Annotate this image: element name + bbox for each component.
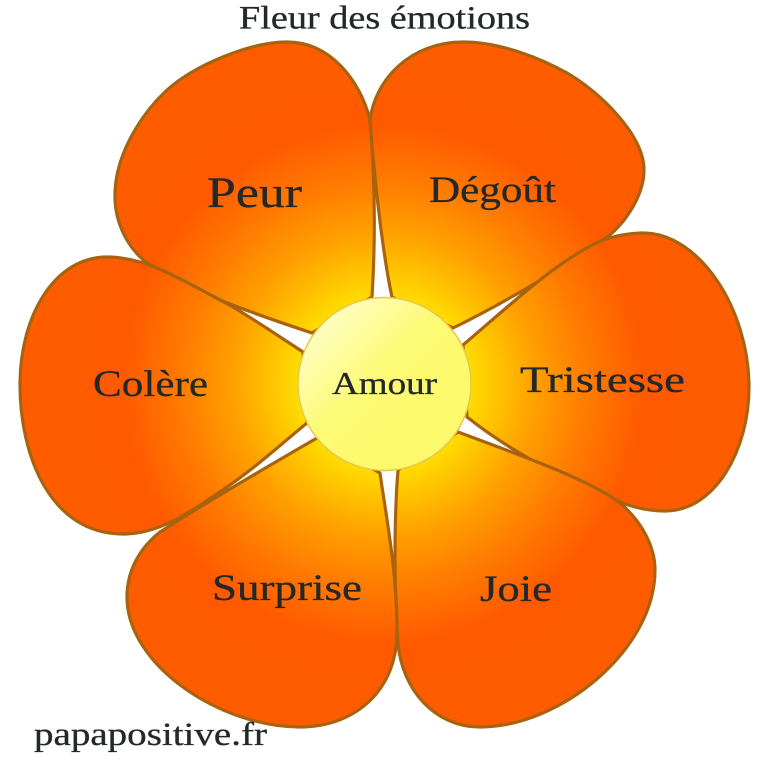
label: Peur: Peur	[207, 170, 302, 217]
title: Fleur des émotions	[239, 0, 530, 36]
label: Tristesse: Tristesse	[520, 360, 685, 401]
petal: Colère	[20, 257, 307, 534]
petal: Dégoût	[370, 42, 644, 328]
petal: Tristesse	[463, 233, 749, 511]
petal: Peur	[115, 42, 374, 333]
label: Dégoût: Dégoût	[429, 170, 557, 211]
petal: Joie	[395, 432, 655, 727]
petal: Surprise	[127, 438, 397, 727]
label: Colère: Colère	[93, 364, 208, 405]
label: Amour: Amour	[332, 365, 437, 401]
source: papapositive.fr	[34, 717, 267, 753]
center circle	[298, 298, 471, 470]
label: Joie: Joie	[480, 569, 552, 610]
label: Surprise: Surprise	[212, 568, 362, 609]
